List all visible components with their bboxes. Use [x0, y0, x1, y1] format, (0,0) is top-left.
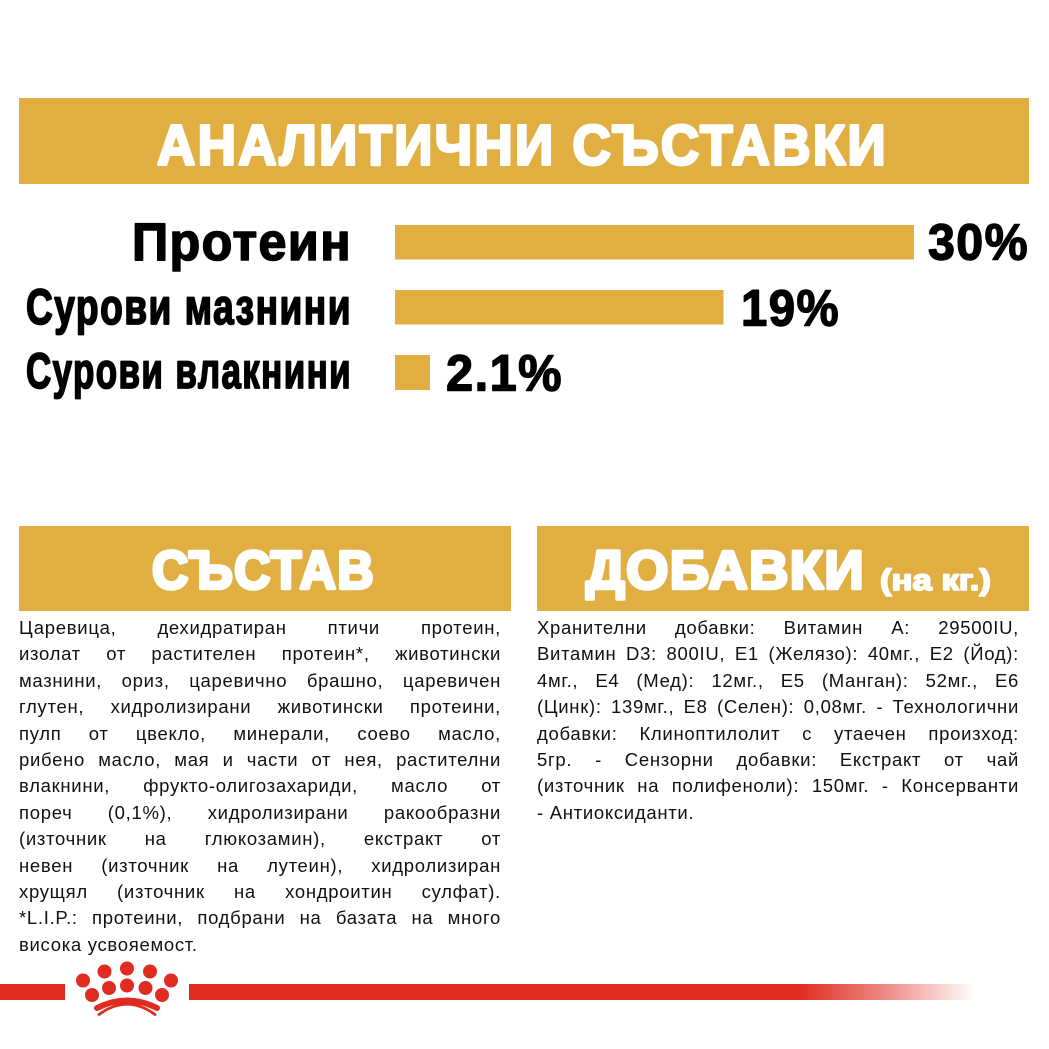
- text block: additives: Хранителни добавки: Витамин А: 29500IU,: [537, 617, 1019, 638]
- text block: composition: висока усвояемост.: [19, 934, 198, 955]
- footer: red stripe: [0, 984, 980, 1000]
- icon: crown logo: [76, 962, 178, 1014]
- text block: composition: изолат от растителен протеин*, животински: [19, 643, 501, 664]
- text block: composition: [19, 617, 501, 955]
- text block: composition: пулп от цвекло, минерали, соево масло,: [19, 723, 501, 744]
- chart: analytical constituents bars: [26, 213, 1029, 402]
- panel: main title band: [19, 98, 1029, 184]
- text block: composition: глутен, хидролизирани животински протеини,: [19, 696, 501, 717]
- row: crude fibre: 2.1%: [446, 344, 563, 402]
- text block: additives: - Антиоксиданти.: [537, 802, 694, 823]
- panel: additives heading: [537, 526, 1029, 611]
- row: protein: Протеин: [132, 213, 352, 272]
- text block: additives: (източник на полифеноли): 150мг. - Консерванти: [537, 775, 1019, 796]
- row: crude fibre: Сурови влакнини: [26, 343, 352, 399]
- text block: composition: Царевица, дехидратиран птичи протеин,: [19, 617, 501, 638]
- panel: additives heading: ДОБАВКИ: [586, 540, 865, 600]
- text block: additives: добавки: Клиноптилолит с утаечен произход:: [537, 723, 1019, 744]
- text block: composition: влакнини, фрукто-олигозахариди, масло от: [19, 775, 501, 796]
- text block: composition: рибено масло, мая и части от нея, растителни: [19, 749, 501, 770]
- panel: composition heading: [19, 526, 511, 611]
- row: protein: [132, 213, 1029, 272]
- text block: composition: хрущял (източник на хондроитин сулфат).: [19, 881, 501, 902]
- row: crude fat: Сурови мазнини: [26, 279, 352, 335]
- panel: additives heading: (на кг.): [880, 564, 991, 597]
- text block: composition: невен (източник на лутеин), хидролизиран: [19, 855, 501, 876]
- text block: composition: *L.I.P.: протеини, подбрани на базата на много: [19, 907, 501, 928]
- text block: additives: 4мг., E4 (Мед): 12мг., E5 (Манган): 52мг., E6: [537, 670, 1019, 691]
- row: protein: 30%: [928, 214, 1029, 270]
- row: crude fat: 19%: [741, 280, 840, 336]
- text block: additives: [537, 617, 1019, 823]
- text block: composition: (източник на глюкозамин), екстракт от: [19, 828, 501, 849]
- text block: additives: (Цинк): 139мг., E8 (Селен): 0,08мг. - Технологични: [537, 696, 1019, 717]
- text block: additives: 5гр. - Сензорни добавки: Екстракт от чай: [537, 749, 1019, 770]
- panel: composition heading: СЪСТАВ: [152, 540, 375, 600]
- text block: additives: Витамин D3: 800IU, E1 (Желязо): 40мг., E2 (Йод):: [537, 643, 1019, 664]
- title: АНАЛИТИЧНИ СЪСТАВКИ: [157, 114, 888, 178]
- text block: composition: мазнини, ориз, царевично брашно, царевичен: [19, 670, 501, 691]
- text block: composition: пореч (0,1%), хидролизирани ракообразни: [19, 802, 501, 823]
- row: crude fat: [26, 279, 840, 336]
